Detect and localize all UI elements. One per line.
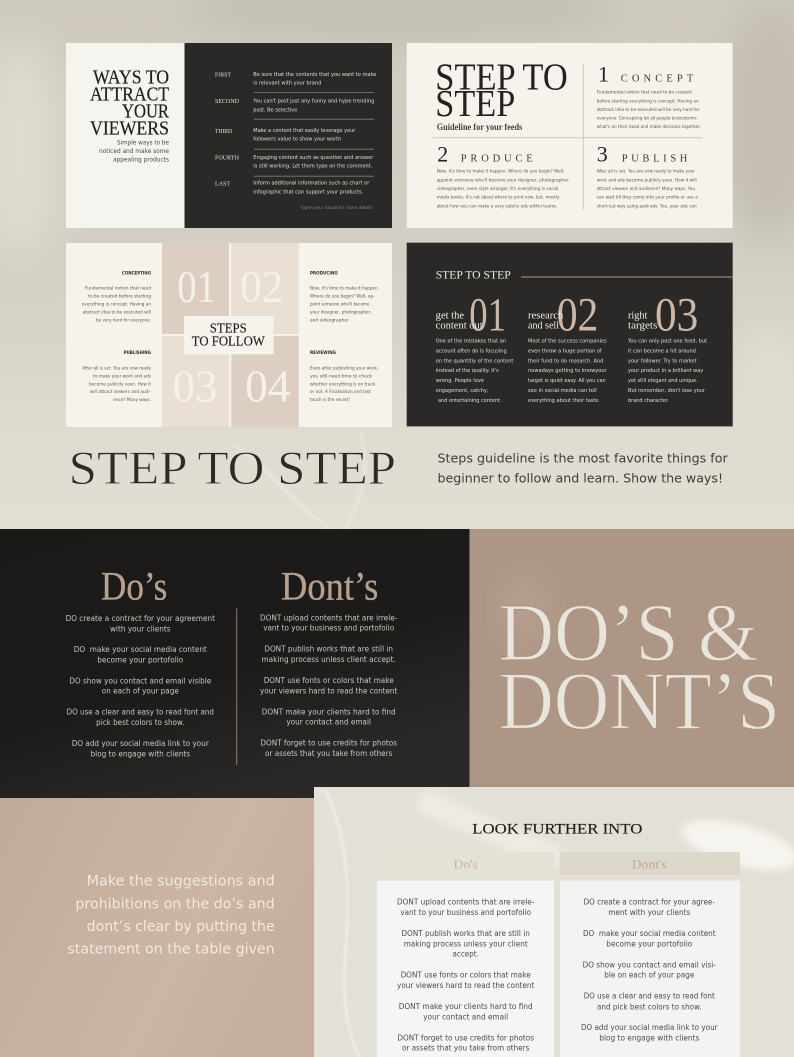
step 1: concept: Fundamental notion that need to be created bbox=[597, 90, 692, 96]
footnote: *open your ebook for more details bbox=[300, 205, 373, 211]
list labels: LAST bbox=[215, 181, 230, 188]
column 3: You can only post one feed, but bbox=[627, 338, 707, 344]
list descriptions: Be sure that the contents that you want to make bbox=[253, 72, 376, 78]
list: dont's: your viewers hard to read the content bbox=[260, 686, 397, 695]
panel: do's and dont's dark bbox=[0, 529, 470, 798]
list: dont's: DONT forget to use credits for photos bbox=[260, 739, 397, 748]
text block: reviewing: touch is the secret! bbox=[310, 397, 350, 403]
heading: dont's: Dont’s bbox=[281, 563, 378, 608]
column 2: even throw a huge portion of bbox=[528, 348, 602, 354]
step 2: produce: Now, it's time to make it happen. Where do you begin? Well, bbox=[437, 169, 564, 175]
column 1: on the quantitiy of the content bbox=[436, 358, 513, 364]
step 1: concept bbox=[597, 62, 701, 130]
table column: dont's: DO show you contact and email visi- bbox=[583, 960, 716, 969]
list labels bbox=[215, 72, 239, 188]
column 1: 01 bbox=[469, 288, 506, 341]
text block: steps guideline: Steps guideline is the most favorite things for bbox=[438, 452, 728, 466]
column 1: One of the mistakes that an bbox=[436, 338, 506, 344]
heading: step to step bbox=[435, 56, 568, 125]
text block: producing: your designer, photographer, bbox=[310, 309, 372, 315]
step 3: publish: can wait till they come into your profile or use a bbox=[597, 194, 698, 200]
list descriptions: followers value to show your worth bbox=[253, 136, 341, 142]
list descriptions: infographic that can support your products. bbox=[253, 189, 364, 195]
column 2: everything about their taste. bbox=[528, 398, 600, 404]
background: top beige photo area bbox=[0, 0, 794, 529]
tile 03 bbox=[162, 336, 229, 427]
text block: publishing: After all is set. You are now ready bbox=[82, 365, 151, 371]
heading: ways to attract your viewers: VIEWERS bbox=[90, 117, 169, 139]
text block: producing: and videographer bbox=[310, 317, 349, 323]
subheading: Guideline for your feeds bbox=[437, 123, 523, 133]
column 1: engagement, catchy, bbox=[436, 388, 489, 394]
list: dont's: DONT publish works that are still in bbox=[264, 645, 393, 654]
column 3: your follower. Try to market bbox=[628, 358, 697, 364]
text block: producing bbox=[310, 270, 379, 323]
text block: publishing: PUBLISHING bbox=[124, 350, 151, 356]
heading: look further into: LOOK FURTHER INTO bbox=[472, 822, 642, 838]
list: do's: DO create a contract for your agreement bbox=[66, 614, 215, 623]
list: dont's: DONT use fonts or colors that make bbox=[264, 676, 394, 685]
table column: dont's: Dont's bbox=[632, 857, 667, 872]
step 3: publish: attract viewers and audience? Many ways. You bbox=[597, 186, 695, 192]
step 2: produce: PRODUCE bbox=[461, 154, 533, 165]
step 1: concept: abstract idea to be executed will be very hard for bbox=[597, 107, 700, 113]
table column: do's: or assets that you take from others bbox=[402, 1044, 529, 1053]
text block: producing: Where do you begin? Well, ap- bbox=[310, 294, 375, 300]
list labels: FOURTH bbox=[215, 155, 239, 162]
list: dont's: your contact and email bbox=[286, 718, 371, 727]
step 3: publish: work and ads become publicly seen. How it will bbox=[597, 177, 697, 183]
list descriptions: is relevant with your brand bbox=[253, 80, 321, 86]
list: dont's bbox=[260, 613, 398, 758]
step 3: publish: 3 bbox=[597, 142, 608, 167]
step 3: publish: After all is set. You are now ready to make your bbox=[597, 169, 695, 175]
panel: do's and dont's tan title bbox=[470, 529, 794, 798]
list: do's: with your clients bbox=[110, 624, 171, 633]
column 1 bbox=[436, 288, 513, 404]
panel: suggestion text bbox=[0, 798, 314, 1057]
column 2: target is quiet easy. All you can bbox=[528, 378, 606, 384]
list: do's: on each of your page bbox=[102, 687, 179, 696]
panel: look further into table bbox=[314, 787, 794, 1057]
list: dont's: DONT make your clients hard to find bbox=[262, 707, 396, 716]
column 2: their fund to do research. And bbox=[528, 358, 603, 364]
list descriptions: Engaging content such as question and answer bbox=[253, 155, 374, 161]
panel: step to step guideline bbox=[407, 43, 733, 228]
step 2: produce: 2 bbox=[437, 142, 448, 167]
tile 04: 04 bbox=[245, 360, 291, 411]
table column: dont's: become your portofolio bbox=[606, 939, 693, 948]
step 2: produce: about how you can make a very catchy ads within teams. bbox=[437, 203, 558, 209]
text block: concepting: everything is concept. Having an bbox=[82, 302, 151, 308]
tile 02: 02 bbox=[240, 261, 283, 312]
text block: producing: Now, it's time to make it happen. bbox=[310, 286, 379, 292]
list labels: FIRST bbox=[215, 72, 231, 79]
heading: ways to attract your viewers: YOUR bbox=[122, 100, 170, 122]
list: do's bbox=[66, 614, 215, 758]
text block: publishing bbox=[82, 350, 152, 403]
list: do's: blog to engage with clients bbox=[90, 749, 190, 758]
column 3: it can become a hit around bbox=[628, 348, 696, 354]
step 1: concept: everyone. Concepting let all people brainstorms bbox=[597, 115, 697, 121]
panel: suggestion text: dont’s clear by putting the bbox=[87, 919, 275, 935]
list: do's: DO add your social media link to your bbox=[72, 739, 210, 748]
column 1: content out bbox=[436, 321, 483, 332]
list: do's: pick best colors to show. bbox=[96, 718, 184, 727]
table column: do's: DONT use fonts or colors that make bbox=[401, 971, 531, 980]
text block: concepting: be very hard for everyone. bbox=[96, 317, 151, 323]
text block: reviewing bbox=[310, 350, 378, 403]
subtitle text: noticed and make some bbox=[99, 148, 169, 155]
table column: do's: DONT make your clients hard to find bbox=[399, 1002, 533, 1011]
table column: dont's: DO make your social media content bbox=[583, 929, 716, 938]
column 3: brand character. bbox=[628, 398, 669, 404]
text block: reviewing: you still need time to check bbox=[310, 373, 373, 379]
list descriptions bbox=[252, 72, 376, 195]
subtitle text: Simple ways to be bbox=[117, 140, 169, 147]
table column: do's: your viewers hard to read the content bbox=[397, 981, 534, 990]
step 2: produce bbox=[437, 142, 570, 209]
table column: dont's: blog to engage with clients bbox=[599, 1033, 699, 1042]
table column: dont's: ment with your clients bbox=[608, 908, 690, 917]
table column: do's: DONT upload contents that are irrele- bbox=[397, 898, 535, 907]
column 3 bbox=[627, 288, 707, 404]
column 3: targets bbox=[628, 321, 657, 332]
subtitle text bbox=[99, 140, 169, 164]
column 3: yet still elegant and unique. bbox=[628, 378, 698, 384]
step 1: concept: 1 bbox=[598, 62, 609, 87]
column 1: get the bbox=[436, 311, 464, 322]
step 3: publish bbox=[597, 142, 698, 209]
step 1: concept: CONCEPT bbox=[621, 73, 694, 84]
panel: suggestion text: statement on the table given bbox=[67, 942, 275, 958]
table column: dont's: ble on each of your page bbox=[604, 971, 695, 980]
text block: concepting: CONCEPTING bbox=[122, 270, 151, 276]
step 2: produce: media books. It's not about where to print now, but, mostly bbox=[437, 194, 560, 200]
table column: do's: DONT forget to use credits for photos bbox=[397, 1033, 534, 1042]
tile 02 bbox=[231, 243, 299, 334]
step 1: concept: before starting everything is concept. Having an bbox=[597, 98, 699, 104]
center label: steps to follow bbox=[184, 316, 274, 354]
list: dont's: vant to your business and portofolio bbox=[263, 624, 395, 633]
text block: producing: PRODUCING bbox=[310, 270, 338, 276]
list labels: SECOND bbox=[215, 98, 239, 105]
column 2 bbox=[528, 288, 607, 404]
list descriptions: You can't post just any funny and hype trending bbox=[252, 99, 374, 105]
text block: publishing: to make your work and ads bbox=[93, 373, 152, 379]
text block: concepting bbox=[82, 270, 151, 323]
list descriptions: Inform additional information such as chart or bbox=[253, 181, 370, 187]
heading: step to step: STEP bbox=[435, 83, 515, 125]
list: dont's: making process unless client accept. bbox=[262, 655, 396, 664]
list: do's: DO use a clear and easy to read font and bbox=[67, 708, 214, 717]
panel: dark step to step columns bbox=[407, 243, 733, 426]
table column: dont's: DO create a contract for your agree- bbox=[584, 898, 715, 907]
step 1: concept: what's on their head and make decisons together. bbox=[597, 124, 701, 130]
heading: do's: Do’s bbox=[101, 563, 167, 608]
title: step to step: STEP TO STEP bbox=[69, 442, 396, 495]
text block: publishing: ence? Many ways. bbox=[113, 397, 151, 403]
column 2: and sell bbox=[528, 321, 559, 332]
heading: STEP TO STEP bbox=[436, 268, 511, 282]
column 1: account often do is focusing bbox=[436, 348, 507, 354]
text block: steps guideline bbox=[438, 452, 728, 485]
table column: do's: DONT publish works that are still in bbox=[402, 929, 530, 938]
list: do's: DO show you contact and email visible bbox=[69, 676, 212, 685]
table column: dont's: DO use a clear and easy to read font bbox=[584, 992, 715, 1001]
heading: step to step: STEP TO bbox=[435, 56, 568, 98]
table column: do's: vant to your business and portofolio bbox=[400, 908, 531, 917]
step 2: produce: videographer, even style arranger. It's everything in social bbox=[437, 186, 558, 192]
list: do's: become your portofolio bbox=[97, 655, 184, 664]
column 2: Most of the success companies bbox=[528, 338, 607, 344]
list labels: THIRD bbox=[215, 128, 232, 135]
text block: reviewing: REVIEWING bbox=[310, 350, 336, 356]
text block: reviewing: or not. A Finalisation and last bbox=[310, 389, 371, 395]
center label: steps to follow: TO FOLLOW bbox=[192, 334, 266, 349]
text block: concepting: abstract idea to be executed will bbox=[83, 309, 151, 315]
tile 03: 03 bbox=[173, 360, 217, 411]
table column: dont's bbox=[560, 852, 740, 1057]
table column: dont's: and pick best colors to show. bbox=[597, 1002, 702, 1011]
text block: concepting: Fundamental notion that need bbox=[85, 286, 151, 292]
text block: producing: point someone who'll become bbox=[310, 302, 370, 308]
column 2: nowadays getting to knowyour bbox=[528, 368, 607, 374]
text block: reviewing: Even after publishing your work, bbox=[310, 365, 378, 371]
text block: reviewing: whether everything is on track bbox=[310, 381, 376, 387]
column 1: instead of the quality. It's bbox=[436, 368, 499, 374]
step 3: publish: PUBLISH bbox=[622, 154, 688, 165]
heading: ways to attract your viewers: WAYS TO bbox=[93, 66, 169, 88]
subtitle text: appealing products bbox=[113, 156, 169, 164]
panel: do's and dont's tan title: DO’S & bbox=[498, 586, 758, 678]
panel: suggestion text: prohibitions on the do’s and bbox=[75, 896, 275, 912]
column 3: right bbox=[628, 311, 647, 322]
text block: publishing: become publicly seen. How it bbox=[89, 381, 151, 387]
column 3: But remember, don't lose your bbox=[628, 388, 706, 394]
list: dont's: or assets that you take from others bbox=[265, 749, 392, 758]
list descriptions: post. Be selective bbox=[253, 107, 297, 113]
column 2: 02 bbox=[557, 288, 598, 341]
text block: steps guideline: beginner to follow and learn. Show the ways! bbox=[438, 471, 723, 485]
table column: dont's: DO add your social media link to your bbox=[581, 1023, 719, 1032]
heading: ways to attract your viewers: ATTRACT bbox=[90, 83, 169, 105]
column 2: research bbox=[528, 311, 564, 322]
text block: publishing: will attract viewers and audi- bbox=[90, 389, 151, 395]
text block: concepting: to be created before starting bbox=[88, 294, 151, 300]
table column: do's bbox=[377, 852, 554, 1057]
table column: do's: making process unless your client bbox=[404, 939, 528, 948]
table column: do's: accept. bbox=[453, 950, 479, 959]
panel: do's and dont's tan title: DONT’S bbox=[498, 655, 780, 747]
column 2: see in social media can tell bbox=[528, 388, 597, 394]
tile 04 bbox=[231, 336, 299, 427]
column 1: wrong. People love bbox=[436, 378, 484, 384]
tile 01: 01 bbox=[177, 261, 216, 312]
table column: do's: your contact and email bbox=[423, 1012, 508, 1021]
step 2: produce: appoint someone who'll become your designer, photographer, bbox=[437, 177, 570, 183]
column 3: your product in a brilliant way bbox=[628, 368, 703, 374]
step 3: publish: short-cut way using paid-ads. Yes, your ads can bbox=[597, 203, 697, 209]
center label: steps to follow: STEPS bbox=[210, 322, 247, 337]
panel: suggestion text: Make the suggestions and bbox=[87, 873, 275, 889]
heading: ways to attract your viewers bbox=[90, 66, 170, 139]
column 1: and entertaining content. bbox=[438, 398, 502, 404]
list descriptions: Make a content that easily leverage your bbox=[253, 128, 356, 134]
table column: do's: Do's bbox=[454, 857, 478, 872]
panel: steps to follow bbox=[66, 243, 392, 427]
column 3: 03 bbox=[655, 288, 698, 341]
tile 01 bbox=[162, 243, 229, 334]
list descriptions: is still working. Let them type on the comment. bbox=[253, 163, 373, 169]
list: dont's: DONT upload contents that are irrele- bbox=[260, 613, 398, 622]
panel: ways to attract your viewers bbox=[66, 43, 392, 228]
list: do's: DO make your social media content bbox=[74, 645, 207, 654]
